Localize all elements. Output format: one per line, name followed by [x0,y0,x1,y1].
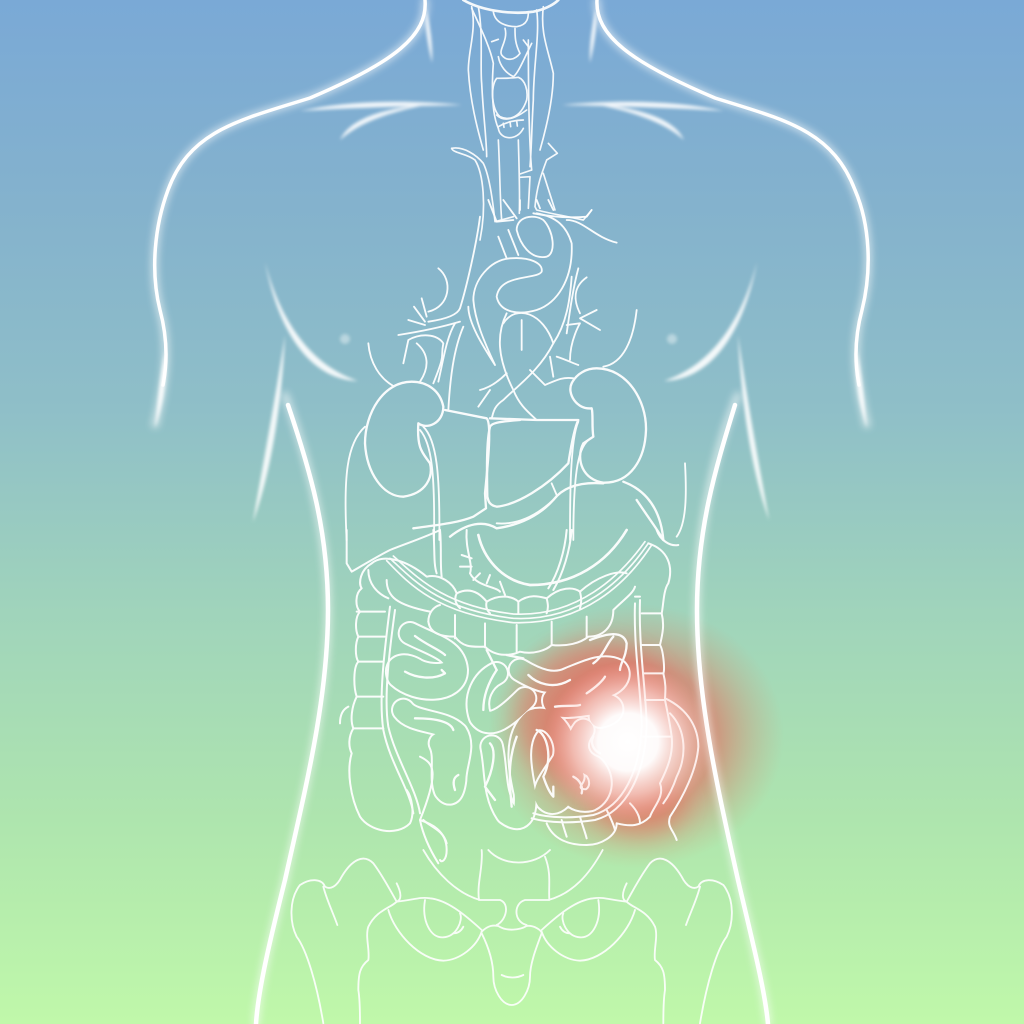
right hip [542,859,732,1023]
kidneys [365,368,646,497]
lower abdomen arcs [423,850,603,933]
colon outer haustra [349,543,672,845]
pain glow: white hot centre [544,662,712,822]
body outline [155,0,868,1024]
chest: heart, vessels, kidneys, liver [346,200,686,540]
abdomen: stomach, colon, small intestine [340,530,698,863]
right shoulder and arm [597,0,868,385]
sacrum [482,933,542,1005]
small intestine inner slits [405,634,627,807]
transverse colon bands [387,542,652,623]
pelvis and hip bones [291,850,732,1023]
liver [346,410,686,540]
left shoulder and arm [155,0,425,385]
nipples [340,334,677,344]
stomach lower edge [347,530,678,595]
pain glow: outer red [488,604,784,868]
bronchi left [368,217,480,410]
left flank [256,405,328,1024]
muscle and collarbone highlights [155,8,867,522]
descending tube and sigmoid [532,600,698,840]
bronchi right [550,268,637,377]
small intestine tubes [397,633,618,818]
heart and great vessels [468,200,617,420]
right flank [697,405,768,1024]
outline glow [155,0,868,1024]
neck and throat structures [452,0,592,240]
ileum and cecum [340,607,447,863]
left hip [291,859,482,1023]
